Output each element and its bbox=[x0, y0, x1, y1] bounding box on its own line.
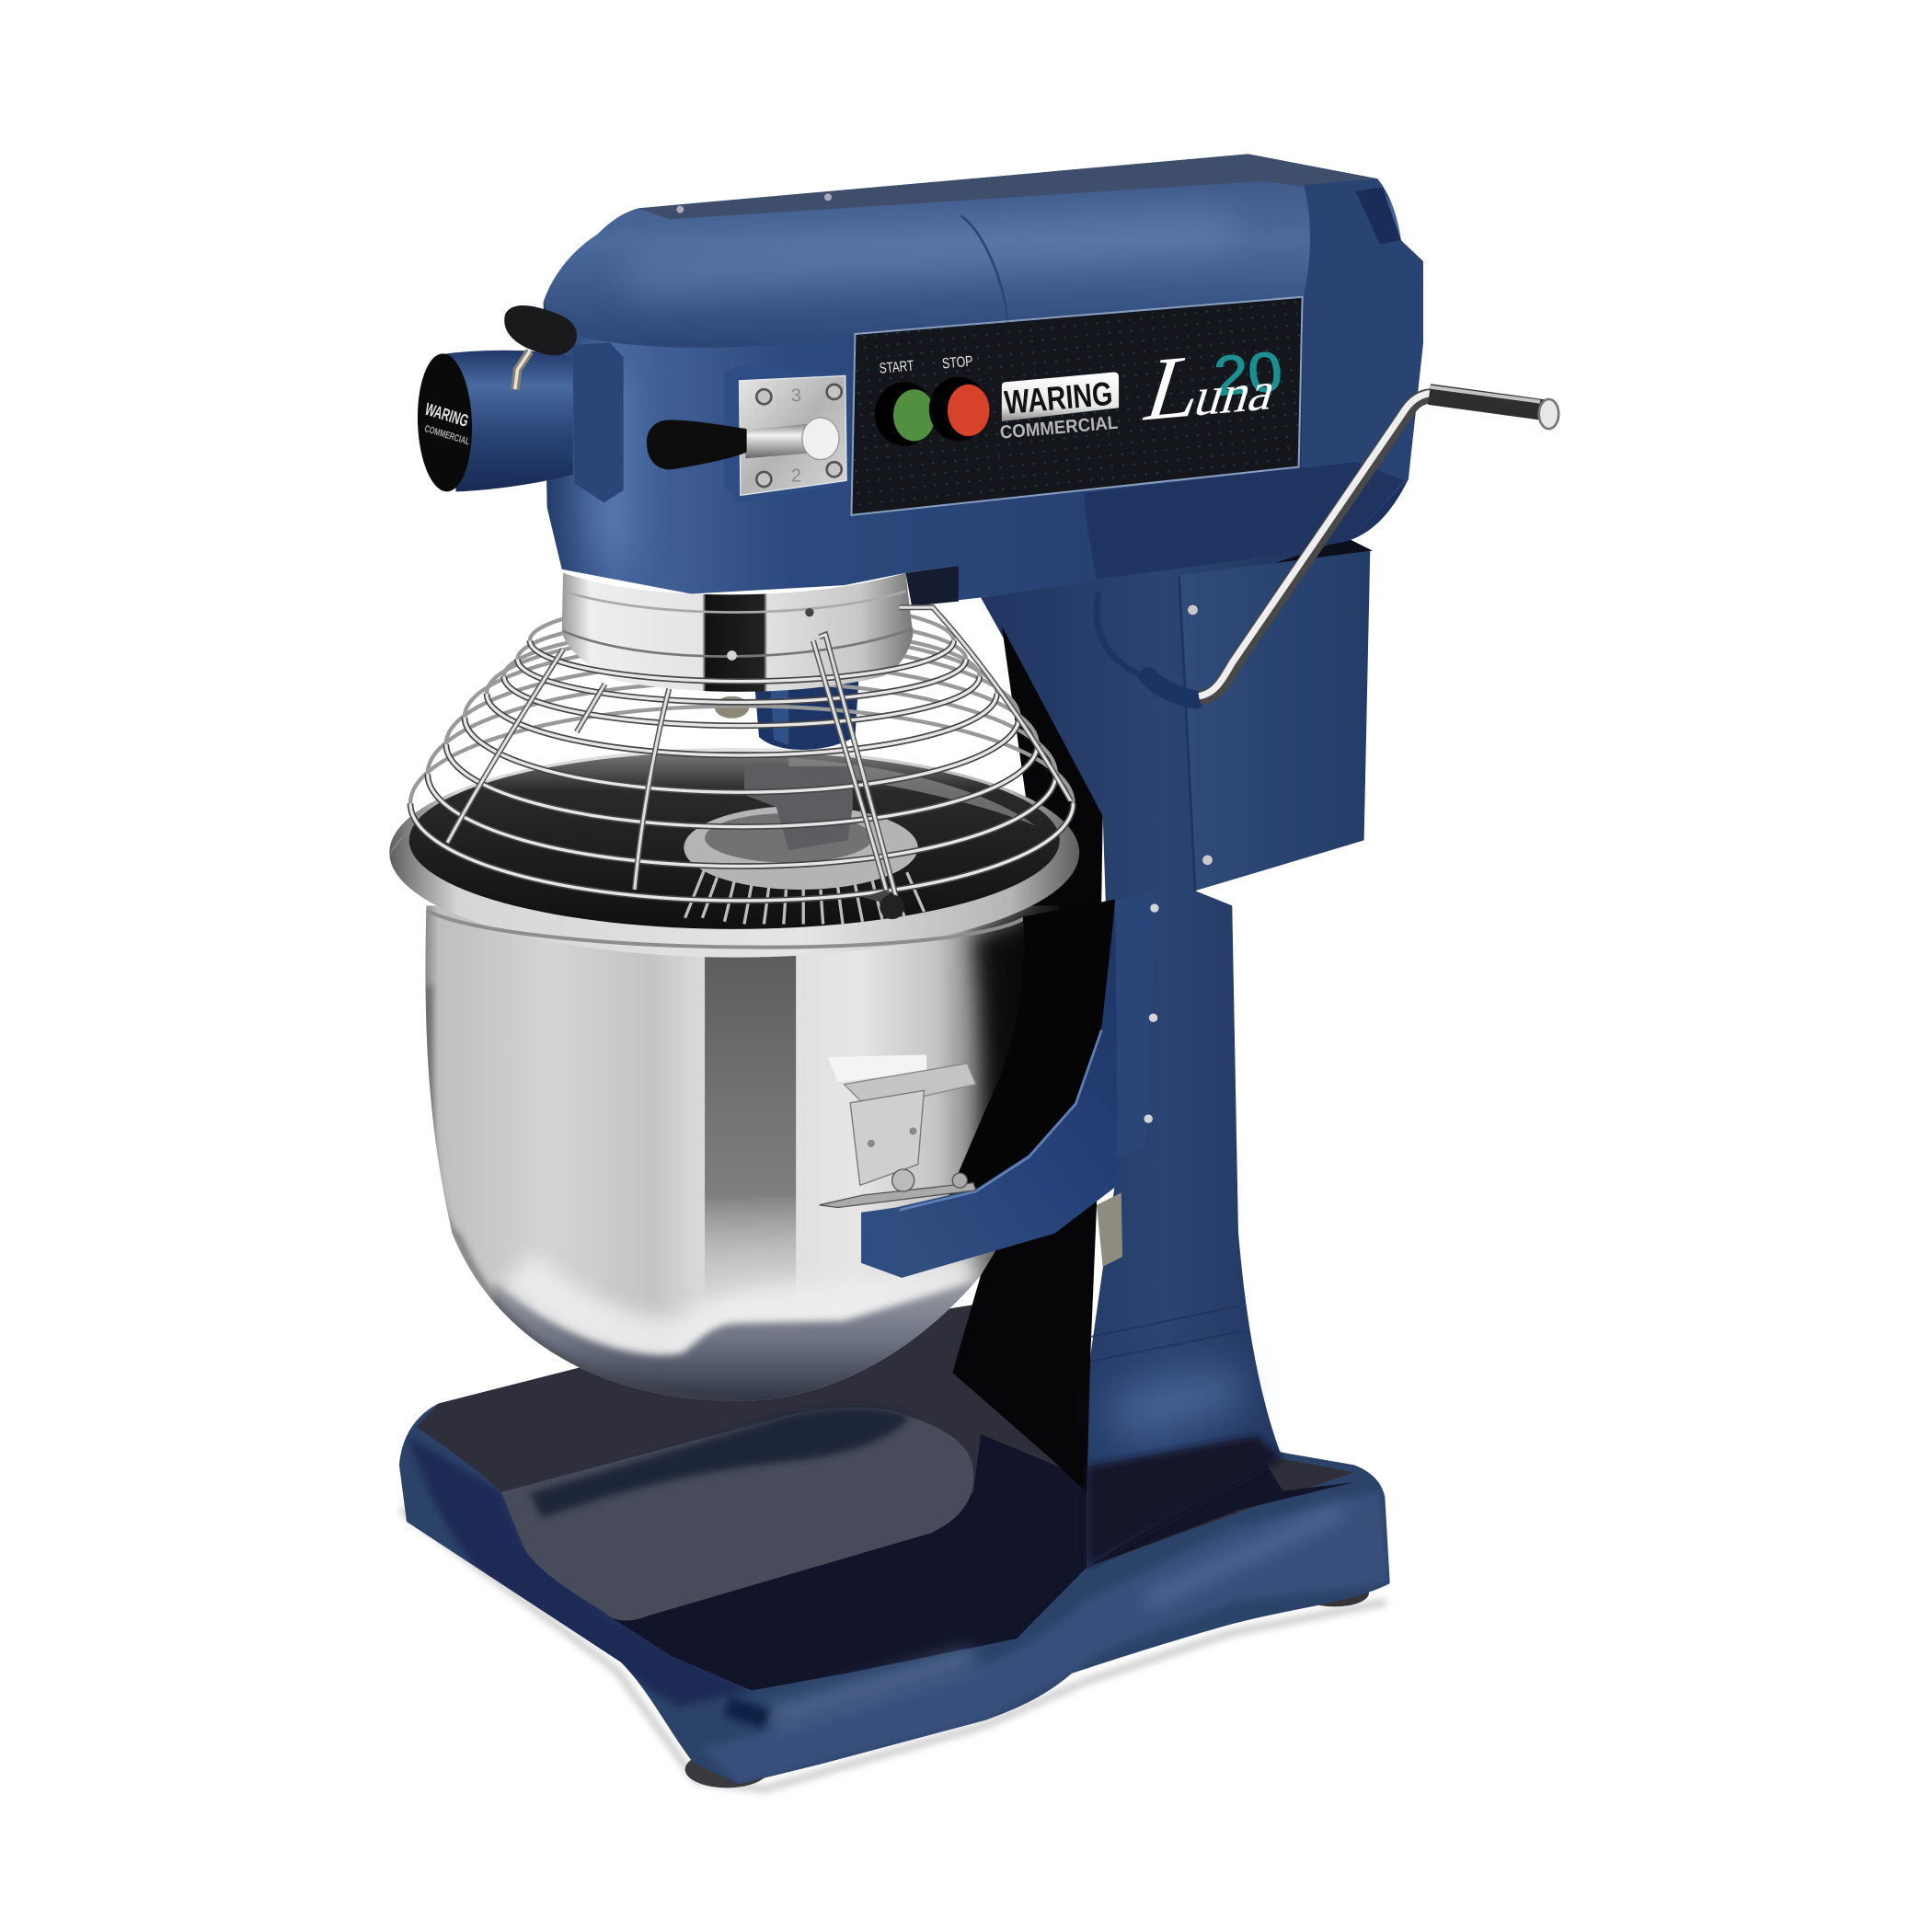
dark bracket under head bbox=[905, 566, 959, 606]
start label: START bbox=[879, 358, 914, 377]
lock lever bbox=[504, 305, 577, 389]
beater whisk bbox=[685, 868, 924, 924]
knob face: WARING bbox=[423, 399, 471, 431]
bowl clamp bbox=[820, 1054, 976, 1207]
highlight on column foot bbox=[1115, 1386, 1238, 1417]
arm plate bbox=[1115, 892, 1159, 1155]
speed selector: 2 bbox=[791, 466, 801, 487]
arm band bbox=[861, 905, 1120, 1278]
rear motor box bbox=[1179, 538, 1373, 891]
guard latch ball bbox=[863, 890, 904, 919]
loop recess below head bbox=[1097, 592, 1146, 678]
waring logo: COMMERCIAL bbox=[999, 413, 1119, 443]
model number 20: 20 bbox=[1212, 339, 1284, 408]
luna script: Luna bbox=[1133, 328, 1294, 441]
base: mixer foot plate bbox=[399, 1305, 1390, 1788]
control panel bbox=[851, 297, 1303, 515]
beater hub bbox=[744, 766, 853, 850]
speed selector: 3 bbox=[791, 386, 801, 407]
mixer head bbox=[544, 154, 1423, 606]
illustration: stand mixer bbox=[389, 154, 1560, 1796]
ground shadow bbox=[400, 1510, 1386, 1789]
plate screws bbox=[756, 385, 842, 487]
beater shaft bbox=[754, 678, 858, 750]
stop button bbox=[929, 377, 989, 441]
meridian wires bbox=[447, 607, 1071, 896]
column: mixer pedestal bbox=[952, 541, 1348, 1568]
knob face bbox=[415, 352, 475, 492]
black side of column bbox=[952, 626, 1103, 1492]
rings bbox=[410, 640, 1074, 901]
start button bbox=[875, 382, 936, 446]
left navy rim bbox=[407, 1435, 752, 1707]
bowl lift knob housing bbox=[415, 305, 624, 502]
lower shade bbox=[1085, 462, 1405, 579]
top flat bbox=[638, 154, 1386, 219]
bowl rim bbox=[389, 748, 1079, 958]
dark recess bbox=[607, 1434, 1354, 1691]
wire guard: back arcs bbox=[410, 600, 1074, 901]
wire guard: front bbox=[410, 607, 1074, 901]
bowl interior bbox=[409, 752, 1060, 929]
chrome collar bbox=[562, 573, 913, 692]
waring logo bbox=[999, 372, 1119, 443]
beater disc bbox=[684, 806, 918, 890]
right cap bbox=[1300, 178, 1423, 548]
bowl support arm bbox=[861, 892, 1159, 1278]
knob face: COMMERCIAL bbox=[423, 423, 471, 448]
speed selector bbox=[647, 366, 850, 502]
crank handle bbox=[1148, 387, 1558, 700]
bowl body bbox=[419, 900, 1065, 1417]
highlights bbox=[770, 1657, 973, 1719]
bowl: stainless steel bbox=[389, 678, 1079, 1417]
upper dome bbox=[544, 154, 1423, 348]
grey reflection bbox=[501, 1408, 973, 1621]
crank grip bbox=[1430, 387, 1558, 429]
stop label: STOP bbox=[941, 353, 973, 372]
highlights bbox=[628, 228, 1232, 277]
feet bbox=[685, 1580, 1369, 1788]
speed lever bbox=[647, 418, 839, 469]
top surface bbox=[417, 1305, 1354, 1616]
waring logo: WARING bbox=[1003, 374, 1114, 421]
